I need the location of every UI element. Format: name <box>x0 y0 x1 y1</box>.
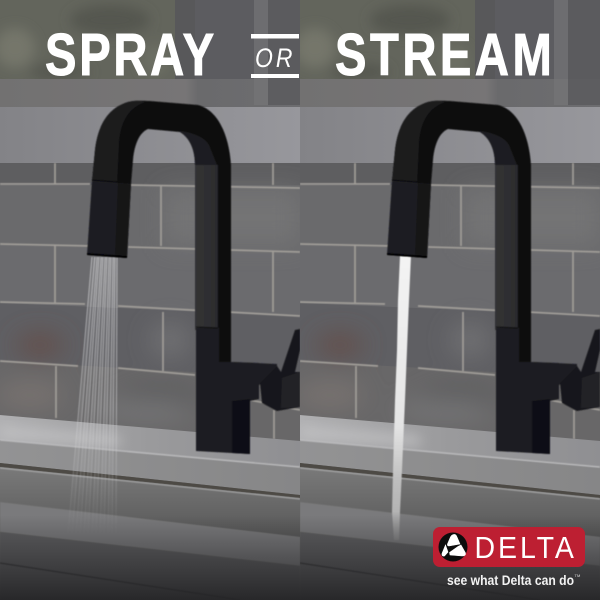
counter and sink <box>300 415 600 600</box>
wordmark: DELTA <box>474 531 577 565</box>
heading: SPRAY: SPRAY <box>45 23 217 88</box>
logo: Delta <box>433 527 585 588</box>
upper wall and window <box>295 0 600 164</box>
faucet <box>87 101 300 454</box>
water stream <box>392 256 411 540</box>
tile backsplash <box>0 163 300 445</box>
heading: STREAM: STREAM <box>335 23 555 88</box>
panel: stream <box>295 0 600 600</box>
water spray <box>68 257 117 535</box>
trademark: TM <box>574 573 580 578</box>
icon: Delta triangle <box>438 532 468 562</box>
counter and sink <box>0 415 300 600</box>
panel: spray <box>0 0 300 600</box>
divider label: OR: OR <box>255 43 295 73</box>
upper wall and window <box>0 0 300 164</box>
logo badge <box>433 527 585 567</box>
faucet <box>387 101 600 454</box>
tagline: see what Delta can do <box>447 572 574 588</box>
tile backsplash <box>296 163 600 445</box>
divider label: OR <box>251 34 299 78</box>
